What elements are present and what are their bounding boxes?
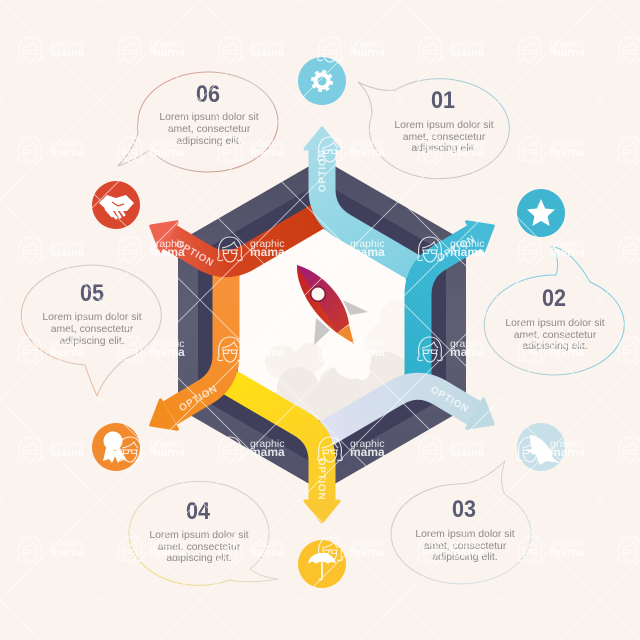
watermark pattern: graphic [350, 138, 384, 150]
arrow 01 light blue [305, 128, 418, 270]
watermark pattern: mama [550, 345, 585, 359]
watermark pattern: mama [50, 145, 85, 159]
watermark pattern: graphic [250, 138, 284, 150]
watermark pattern: mama [150, 345, 185, 359]
watermark pattern: graphic [350, 538, 384, 550]
watermark pattern: graphic [150, 538, 184, 550]
text block 02: adipiscing elit. [522, 341, 588, 352]
watermark pattern: mama [450, 145, 485, 159]
text block 04: 04 [186, 498, 211, 525]
icon: ribbon badge [92, 423, 140, 471]
watermark pattern: mama [550, 545, 585, 559]
watermark pattern: graphic [550, 138, 584, 150]
watermark pattern: graphic [350, 438, 384, 450]
watermark pattern: mama [450, 45, 485, 59]
arrow 02 teal: OPTION [435, 233, 478, 264]
watermark pattern: graphic [450, 338, 484, 350]
text block 03: 03 [452, 496, 476, 523]
text block 01 [394, 87, 494, 154]
arrow 03 pale blue [322, 384, 502, 439]
watermark pattern: mama [550, 45, 585, 59]
text block 05: Lorem ipsum dolor sit [42, 312, 142, 323]
watermark pattern: mama [50, 245, 85, 259]
watermark pattern: mama [550, 445, 585, 459]
watermark pattern: graphic [350, 338, 384, 350]
watermark pattern: mama [150, 45, 185, 59]
watermark pattern: mama [150, 245, 185, 259]
watermark pattern: mama [50, 345, 85, 359]
dark hexagon frame [178, 159, 466, 491]
arrow 06 bend overlap and label: OPTION [173, 238, 216, 269]
watermark pattern: graphic [50, 38, 84, 50]
text block 02: amet, consectetur [514, 330, 597, 341]
text block 01: 01 [431, 87, 455, 114]
arrow 04 yellow: OPTION [316, 458, 326, 500]
text block 05 [42, 280, 142, 347]
watermark pattern: mama [250, 45, 285, 59]
watermark pattern: mama [350, 45, 385, 59]
icon: star [517, 189, 565, 237]
watermark pattern: graphic [550, 538, 584, 550]
watermark pattern: mama [450, 445, 485, 459]
text block 04: amet, consectetur [158, 542, 241, 553]
smoke clouds [265, 343, 404, 421]
watermark pattern: graphic [250, 38, 284, 50]
arrow 01 light blue: OPTION [318, 150, 328, 192]
watermark pattern: graphic [550, 38, 584, 50]
watermark pattern: graphic [150, 338, 184, 350]
arrow 03 pale blue: OPTION [428, 384, 471, 415]
watermark pattern: mama [350, 445, 385, 459]
watermark pattern: mama [350, 345, 385, 359]
text block 01: Lorem ipsum dolor sit [394, 120, 494, 131]
arrow 02 teal [418, 211, 502, 380]
text block 01: amet, consectetur [403, 132, 486, 143]
watermark pattern: mama [450, 245, 485, 259]
watermark pattern: graphic [50, 238, 84, 250]
text block 05: amet, consectetur [51, 324, 134, 335]
watermark pattern: mama [250, 545, 285, 559]
watermark pattern: mama [150, 145, 185, 159]
icon: umbrella [298, 540, 346, 588]
speech bubble 04 outline [129, 481, 279, 585]
watermark pattern: graphic [550, 438, 584, 450]
watermark pattern: graphic [50, 538, 84, 550]
speech bubble 02 outline [484, 246, 624, 375]
speech bubble 03 outline [391, 461, 531, 584]
text block 06: 06 [196, 81, 220, 108]
watermark pattern: mama [50, 45, 85, 59]
watermark pattern: graphic [550, 238, 584, 250]
watermark pattern: graphic [150, 238, 184, 250]
watermark pattern: graphic [250, 538, 284, 550]
watermark pattern: mama [350, 145, 385, 159]
text block 03: amet, consectetur [424, 541, 507, 552]
watermark pattern: graphic [250, 238, 284, 250]
text block 06: amet, consectetur [168, 124, 251, 135]
watermark pattern: graphic [150, 138, 184, 150]
watermark pattern: mama [250, 445, 285, 459]
arrow 05 orange [142, 265, 226, 440]
watermark pattern: graphic [350, 238, 384, 250]
text block 06: Lorem ipsum dolor sit [159, 112, 259, 123]
watermark pattern: graphic [150, 438, 184, 450]
watermark pattern: mama [550, 145, 585, 159]
text block 03 [415, 496, 515, 563]
text block 03: Lorem ipsum dolor sit [415, 529, 515, 540]
watermark pattern: graphic [550, 338, 584, 350]
text block 04 [149, 498, 249, 564]
watermark pattern: graphic [50, 338, 84, 350]
watermark pattern: mama [250, 145, 285, 159]
watermark pattern: graphic [450, 238, 484, 250]
watermark pattern: graphic [150, 38, 184, 50]
text block 03: adipiscing elit. [432, 552, 498, 563]
watermark pattern: mama [50, 445, 85, 459]
icon: gear [298, 57, 346, 105]
speech bubble 06 outline [118, 72, 278, 172]
text block 05: adipiscing elit. [59, 336, 125, 347]
speech bubble 01 outline [358, 79, 509, 179]
text block 02: 02 [542, 285, 566, 312]
text block 02: Lorem ipsum dolor sit [505, 318, 605, 329]
rocket [297, 265, 368, 345]
speech bubble 05 outline [21, 265, 161, 396]
watermark pattern: mama [50, 545, 85, 559]
watermark pattern: graphic [350, 38, 384, 50]
watermark pattern: graphic [250, 438, 284, 450]
watermark pattern: mama [450, 545, 485, 559]
text block 01: adipiscing elit. [411, 143, 477, 154]
arrow 06 bend overlap and label [173, 238, 248, 269]
arrow 04 yellow [226, 380, 339, 522]
watermark pattern: mama [450, 345, 485, 359]
watermark pattern: graphic [450, 538, 484, 550]
text block 05: 05 [80, 280, 104, 307]
text block 04: adipiscing elit. [166, 553, 232, 564]
watermark pattern: mama [550, 245, 585, 259]
watermark pattern: graphic [50, 138, 84, 150]
watermark pattern: mama [350, 245, 385, 259]
watermark pattern: mama [150, 445, 185, 459]
watermark pattern: mama [250, 245, 285, 259]
watermark pattern: graphic [450, 38, 484, 50]
icon: handshake [92, 181, 140, 229]
text block 06: adipiscing elit. [176, 136, 242, 147]
text block 02 [505, 285, 605, 352]
watermark pattern: graphic [450, 138, 484, 150]
watermark pattern: mama [150, 545, 185, 559]
arrow 06 red [142, 211, 322, 264]
watermark pattern: graphic [450, 438, 484, 450]
text block 04: Lorem ipsum dolor sit [149, 530, 249, 541]
icon: pale rocket [517, 423, 565, 471]
watermark pattern: graphic [50, 438, 84, 450]
watermark pattern: graphic [250, 338, 284, 350]
text block 06 [159, 81, 259, 147]
watermark pattern: mama [250, 345, 285, 359]
arrow 05 orange: OPTION [177, 383, 220, 414]
watermark pattern: mama [350, 545, 385, 559]
